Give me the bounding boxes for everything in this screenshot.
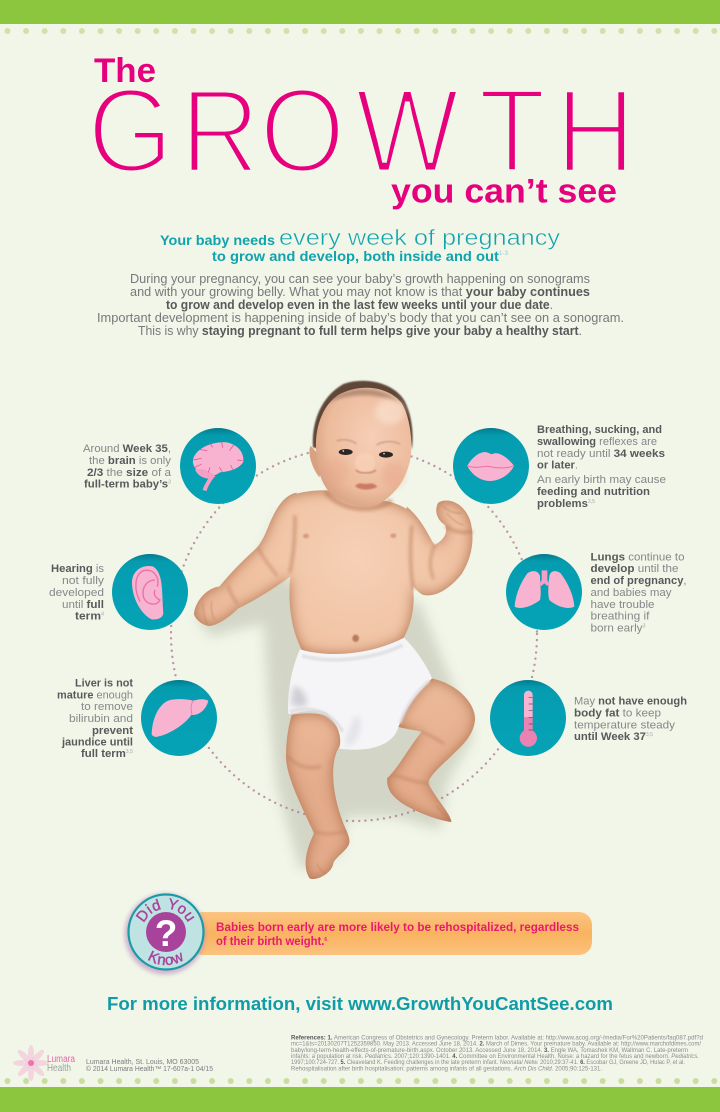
baby hands and toes xyxy=(203,507,463,873)
text: brain: full-term baby’s xyxy=(84,478,168,490)
did you know badge: Did You xyxy=(136,898,194,922)
circle: brain xyxy=(180,428,256,504)
text: hearing: developed xyxy=(49,587,104,599)
circle: lungs xyxy=(506,554,582,630)
icon: ear xyxy=(132,566,163,619)
baby skin xyxy=(194,490,475,879)
text: body fat xyxy=(574,696,687,743)
text: brain: the brain is only xyxy=(89,455,172,467)
text: liver xyxy=(57,678,133,760)
text: hearing xyxy=(49,563,105,622)
text: hearing: 4 xyxy=(101,612,104,618)
top dotted border xyxy=(4,28,717,34)
references: infants: a population at risk. Pediatrics. 2007;120:1390-1401. 4. Committee on Environmental Health. Noise: a hazard for the fetus and newborn. Pediatrics. xyxy=(291,1054,699,1060)
text: breathing: 3,5 xyxy=(588,499,595,505)
text: body fat: May not have enough xyxy=(574,696,687,708)
text: breathing: problems xyxy=(537,498,588,510)
text: brain xyxy=(83,443,172,490)
references: mc=1&ts=20130207T1252359850. May 2013. Accessed June 18, 2014. 2. March of Dimes. Your premature baby. Available at: http://www.marchofdimes.com/ xyxy=(291,1042,701,1048)
baby nose xyxy=(356,470,376,473)
text: lungs: breathing if xyxy=(590,610,651,622)
text: liver: 3,5 xyxy=(126,749,133,755)
references: Rehospitalisation after birth hospitalisation: patterns among infants of all gestations. Arch Dis Child. 2005;90:125-131. xyxy=(291,1066,602,1072)
bottom green band xyxy=(0,1087,720,1112)
text: liver: jaundice until xyxy=(61,736,133,748)
title: GROWTH xyxy=(87,65,635,198)
intro paragraph: and with your growing belly. What you may not know is that your baby continues xyxy=(130,284,590,299)
callout bar: Babies born early are more likely to be rehospitalized, regardless xyxy=(216,920,579,934)
text: liver: Liver is not xyxy=(75,678,133,690)
text: breathing: An early birth may cause xyxy=(537,474,666,486)
text: lungs: and babies may xyxy=(590,587,672,599)
callout: did you know xyxy=(122,891,592,977)
icon: lips xyxy=(467,452,514,481)
text: liver: full term xyxy=(81,748,126,760)
icon: brain xyxy=(193,442,243,491)
text: hearing: until full xyxy=(62,599,104,611)
circle: ear xyxy=(112,554,188,630)
subheading: 1-3 xyxy=(499,251,509,257)
icon: thermometer xyxy=(520,691,537,747)
text: lungs: end of pregnancy, xyxy=(590,575,686,587)
text: breathing xyxy=(537,424,666,510)
text: lungs: develop until the xyxy=(590,563,678,575)
text: lungs xyxy=(590,552,686,634)
text: body fat: 3,5 xyxy=(646,732,653,738)
text: liver: bilirubin and xyxy=(69,713,133,725)
text: hearing: not fully xyxy=(62,575,105,587)
text: liver: mature enough xyxy=(57,690,133,702)
text: liver: prevent xyxy=(92,725,133,737)
logo: Lumara Health xyxy=(13,1045,75,1081)
logo: Lumara Health: Lumara xyxy=(47,1054,75,1065)
website link: For more information, visit www.GrowthYouCantSee.com xyxy=(107,994,613,1014)
intro paragraph: Important development is happening inside of baby’s body that you can’t see on a sonogram. xyxy=(97,310,624,325)
text: body fat: body fat to keep xyxy=(574,708,661,720)
references xyxy=(291,1036,703,1072)
text: breathing: not ready until 34 weeks xyxy=(537,448,665,460)
intro paragraph: During your pregnancy, you can see your baby’s growth happening on sonograms xyxy=(130,271,590,286)
subheading xyxy=(160,225,560,264)
did you know badge: ? xyxy=(155,913,177,954)
dotted ring xyxy=(171,447,537,821)
callout bar: of their birth weight. xyxy=(216,934,331,948)
circle: thermometer xyxy=(490,680,566,756)
baby creases xyxy=(228,493,472,834)
callout bar xyxy=(190,912,592,955)
text: breathing: Breathing, sucking, and xyxy=(537,424,662,436)
icon: flower xyxy=(13,1045,49,1081)
references: baby/long-term-health-effects-of-premature-birth.aspx. October 2013. Accessed June 18, 2014. 3. Engle WA, Tomashek KM, Wallman C. Late-preterm xyxy=(291,1048,688,1054)
baby mouth xyxy=(355,483,377,490)
bottom dotted border xyxy=(4,1078,717,1084)
text: breathing: feeding and nutrition xyxy=(537,486,650,498)
text: breathing: swallowing reflexes are xyxy=(537,436,657,448)
text: breathing: or later. xyxy=(537,460,578,472)
callout bar: 6 xyxy=(324,937,327,943)
circle: lips xyxy=(453,428,529,504)
baby brows xyxy=(337,440,400,445)
diaper xyxy=(288,638,432,750)
text: brain: Around Week 35, xyxy=(83,443,171,455)
address: © 2014 Lumara Health™ 17-607a-1 04/15 xyxy=(86,1065,213,1073)
text: lungs: Lungs continue to xyxy=(590,552,684,564)
subheading: to grow and develop, both inside and out xyxy=(212,248,485,264)
subheading: Your baby needs xyxy=(160,232,275,248)
did you know badge xyxy=(122,891,208,977)
icon: liver xyxy=(152,699,208,737)
intro paragraph: to grow and develop even in the last few weeks until your due date. xyxy=(166,297,553,312)
baby xyxy=(194,381,475,879)
text: brain: 3 xyxy=(168,480,171,486)
text: brain: 2/3 the size of a xyxy=(87,467,172,479)
baby head xyxy=(309,381,413,506)
circle: liver xyxy=(141,680,217,756)
text: body fat: temperature steady xyxy=(574,720,676,732)
logo: Lumara Health: Health xyxy=(47,1063,71,1074)
address: Lumara Health, St. Louis, MO 63005 xyxy=(86,1059,199,1066)
top green band xyxy=(0,0,720,24)
baby nipples and navel xyxy=(303,533,396,642)
title: you can’t see xyxy=(391,172,617,210)
text: lungs: 3 xyxy=(643,624,646,630)
text: hearing: Hearing is xyxy=(51,563,105,575)
intro paragraph: This is why staying pregnant to full term helps give your baby a healthy start. xyxy=(138,323,582,338)
text: lungs: have trouble xyxy=(590,599,654,611)
text: body fat: until Week 37 xyxy=(574,731,646,743)
text: lungs: born early xyxy=(590,622,639,634)
address xyxy=(86,1059,213,1073)
subheading: every week of pregnancy xyxy=(279,225,560,250)
icon: lungs xyxy=(515,570,574,608)
intro paragraph xyxy=(97,271,624,338)
title: The xyxy=(94,52,156,90)
references: 1997;100:724-727. 5. Cleaveland K. Feeding challenges in the late preterm infant. Neonatal Netw. 2010;29:37-41. 6. Escobar GJ, Greene JD, Hulac P, et al. xyxy=(291,1060,685,1066)
text: liver: to remove xyxy=(81,701,133,713)
references: References: 1. American Congress of Obstetrics and Gynecology. Preterm labor. Available at: http://www.acog.org/-/media/For%20Patients/faq087.pdf?d xyxy=(291,1036,703,1042)
did you know badge: Know xyxy=(148,950,183,966)
text: hearing: term xyxy=(75,610,101,622)
baby shadow xyxy=(197,510,473,870)
baby eyes xyxy=(339,449,393,458)
